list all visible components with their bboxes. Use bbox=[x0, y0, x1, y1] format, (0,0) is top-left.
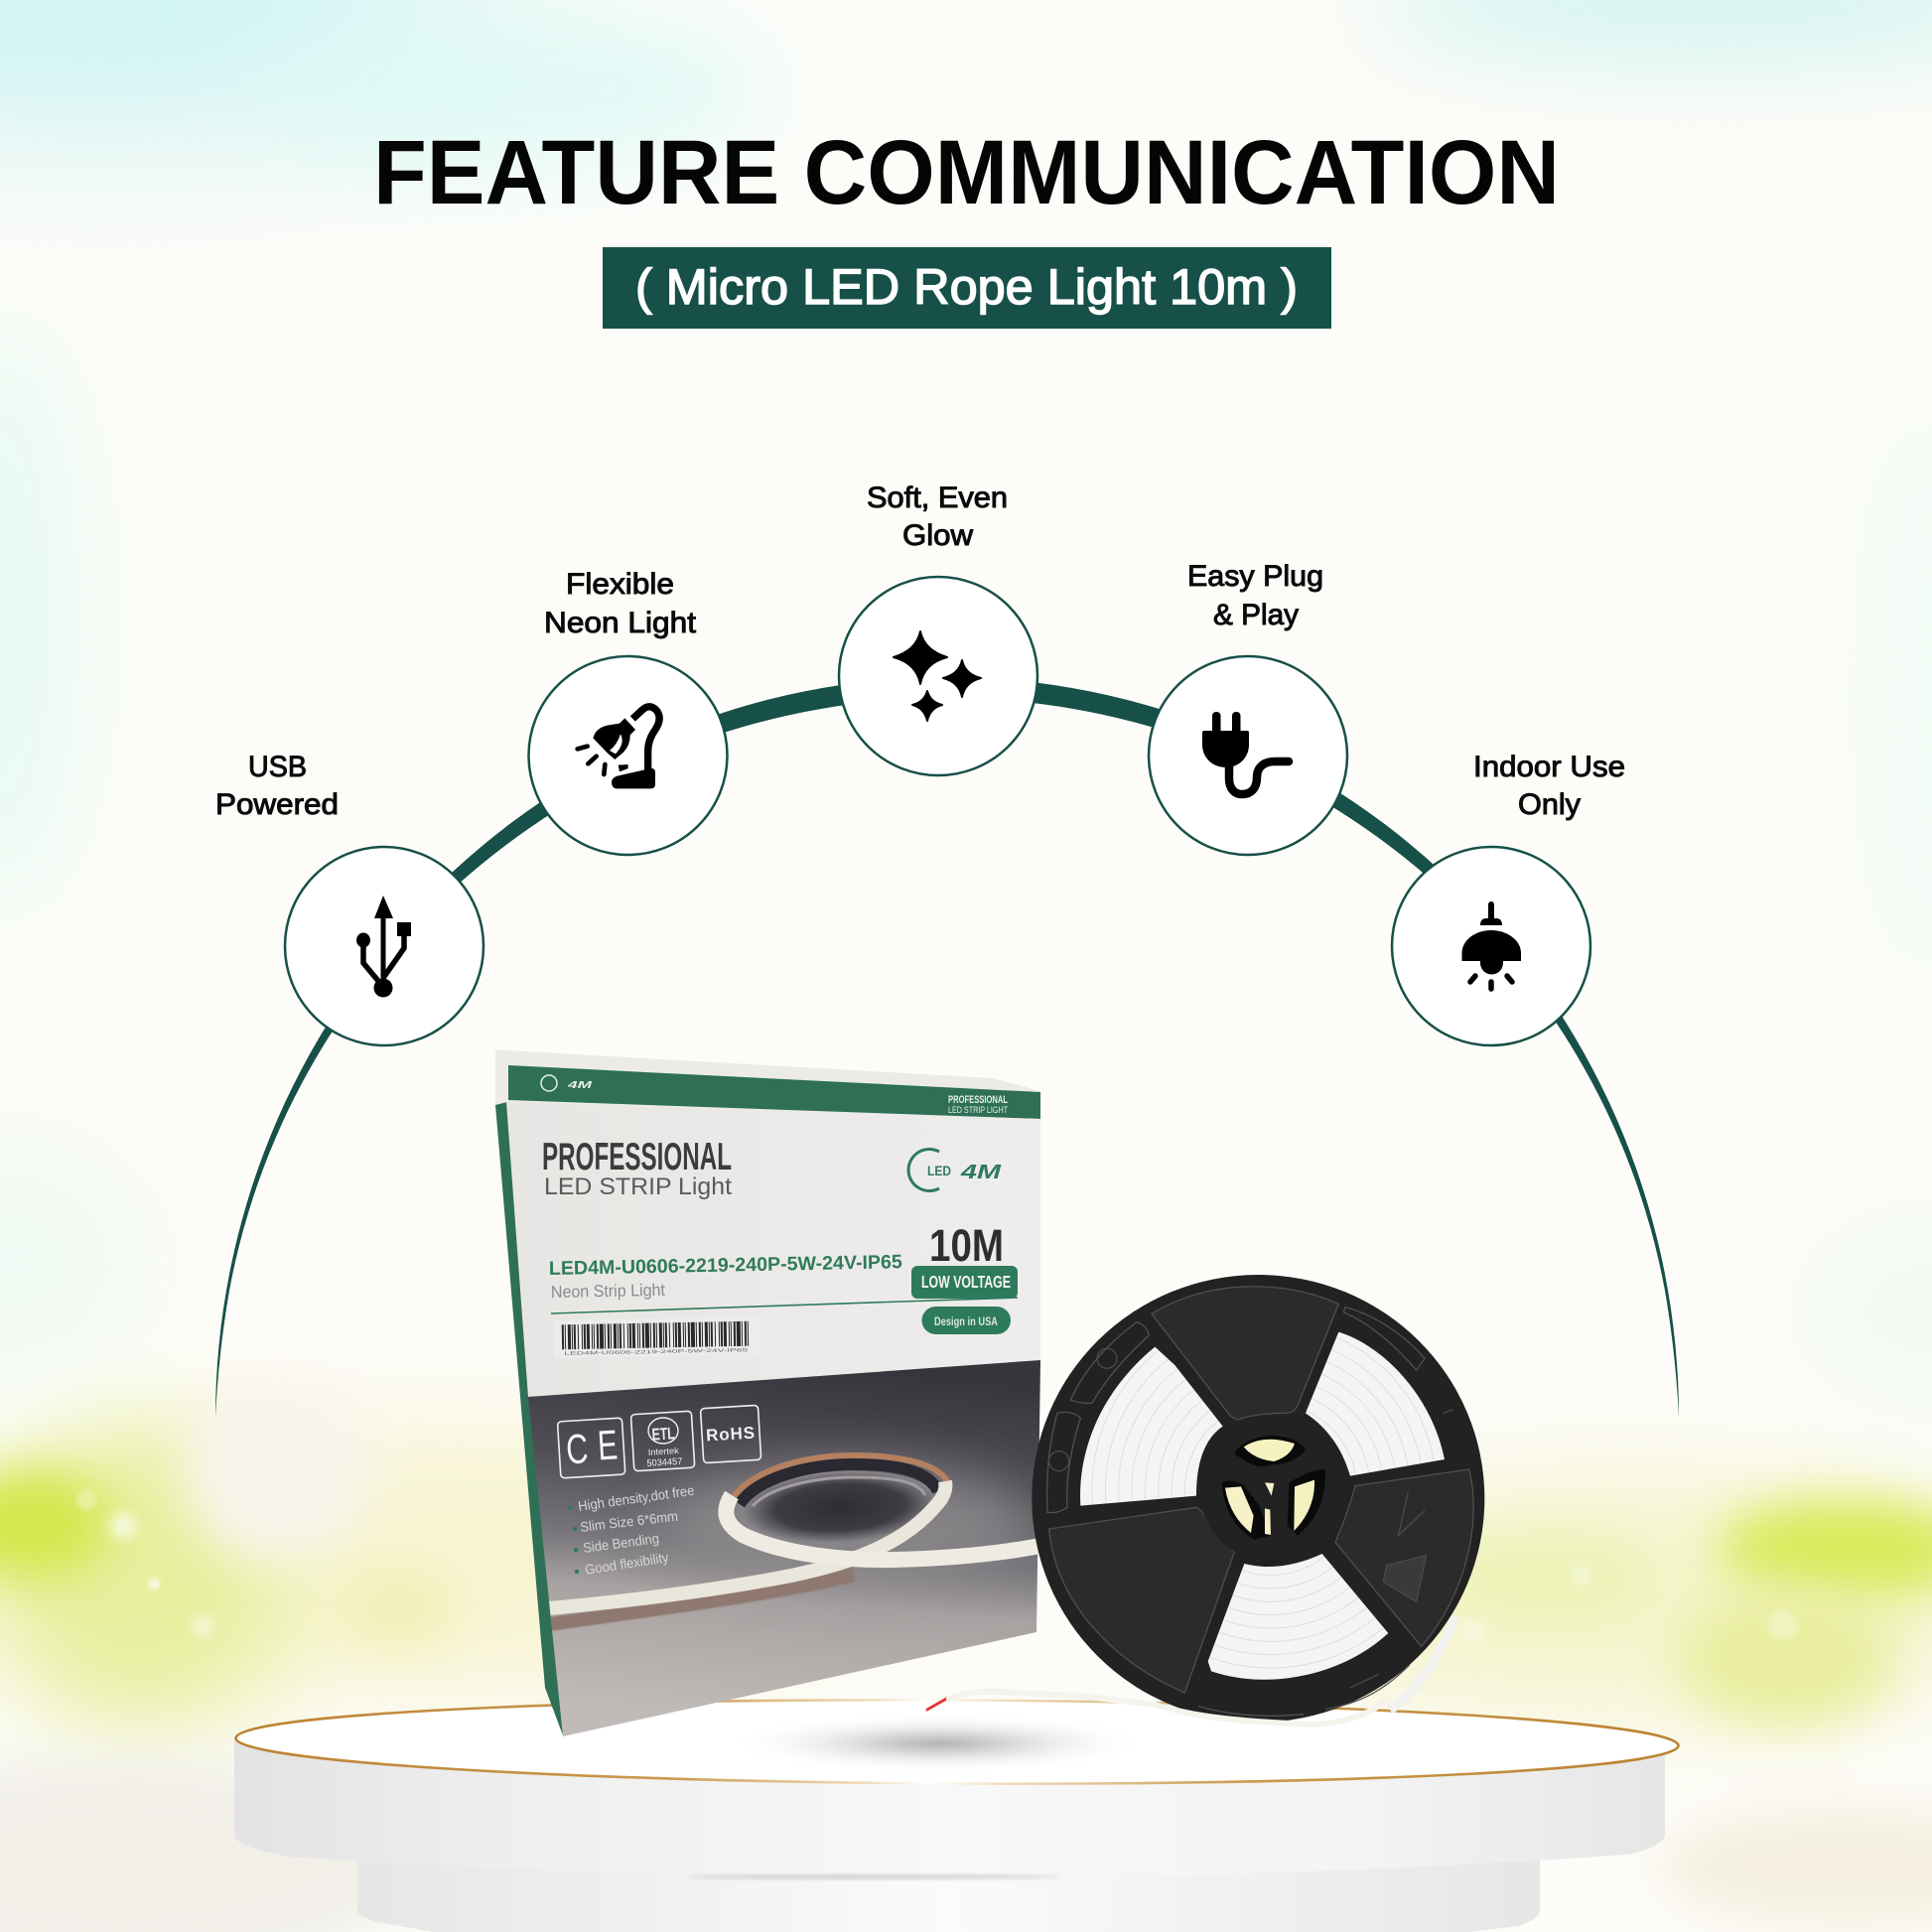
box photo panel bbox=[528, 1360, 1040, 1736]
box front face bbox=[506, 1102, 1040, 1397]
box spine bbox=[495, 1102, 563, 1735]
product: LED strip box: Neon Strip Light bbox=[551, 1281, 665, 1302]
label: USB Powered bbox=[215, 751, 339, 821]
product: LED strip box bbox=[495, 1049, 1040, 1736]
feature: USB Powered bbox=[215, 751, 483, 1045]
label: Easy Plug & Play bbox=[1187, 560, 1323, 631]
feature bullets on box bbox=[568, 1482, 695, 1578]
certification marks: 5034457 bbox=[646, 1456, 683, 1469]
LED strip behind reel bbox=[1390, 1616, 1455, 1710]
label: Indoor Use Only bbox=[1473, 751, 1625, 821]
barcode bbox=[554, 1316, 761, 1358]
icon: USB symbol bbox=[356, 896, 411, 997]
label: Indoor Use Only: Indoor Use bbox=[1473, 751, 1625, 783]
circle: lamp bbox=[528, 656, 727, 855]
reel rim highlights bbox=[1047, 1308, 1425, 1716]
title: FEATURE COMMUNICATION bbox=[373, 122, 1560, 223]
feature bullets on box: Slim Size 6*6mm bbox=[579, 1508, 679, 1535]
feature: Soft, Even Glow bbox=[839, 482, 1037, 775]
label: Flexible Neon Light bbox=[544, 568, 697, 639]
reel hub bbox=[1199, 1415, 1343, 1562]
label: Easy Plug & Play: Easy Plug bbox=[1187, 560, 1323, 593]
band text: PROFESSIONAL bbox=[948, 1094, 1008, 1106]
icon: desk lamp bbox=[578, 707, 659, 788]
label: Soft, Even Glow bbox=[867, 482, 1008, 552]
length badge: 10M bbox=[929, 1220, 1004, 1271]
subtitle banner bbox=[603, 247, 1331, 329]
model number: LED4M-U0606-2219-240P-5W-24V-IP65 bbox=[549, 1251, 902, 1280]
circle: ceiling lamp bbox=[1392, 847, 1590, 1045]
label: Easy Plug & Play: & Play bbox=[1213, 599, 1299, 631]
brand logo: 4M bbox=[960, 1162, 1003, 1183]
circle: plug bbox=[1149, 656, 1347, 855]
label: Flexible Neon Light: Flexible bbox=[566, 568, 674, 601]
reel blades bbox=[1049, 1287, 1473, 1693]
brand logo: LED bbox=[927, 1163, 951, 1178]
length badge bbox=[911, 1220, 1018, 1334]
label: USB Powered: Powered bbox=[215, 788, 339, 821]
circle: sparkle bbox=[839, 577, 1037, 775]
certification marks: E bbox=[597, 1421, 619, 1469]
feature: Flexible Neon Light bbox=[528, 568, 727, 855]
label: Indoor Use Only: Only bbox=[1518, 788, 1581, 821]
brand logo bbox=[908, 1149, 1003, 1191]
green top band bbox=[508, 1065, 1040, 1119]
circle: USB bbox=[285, 847, 483, 1045]
certification marks: Intertek bbox=[647, 1446, 680, 1457]
certification marks bbox=[557, 1405, 761, 1478]
feature: Easy Plug & Play bbox=[1149, 560, 1347, 855]
box back flap bbox=[495, 1049, 1040, 1122]
band text: LED STRIP LIGHT bbox=[948, 1105, 1008, 1115]
reel disc bbox=[1032, 1275, 1484, 1723]
reel embossed marks bbox=[1049, 1348, 1452, 1688]
LED strip cable bbox=[927, 1692, 1387, 1725]
band text bbox=[541, 1075, 1008, 1115]
feature: Indoor Use Only bbox=[1392, 751, 1625, 1045]
podium top with gold rim bbox=[235, 1697, 1679, 1787]
podium base bbox=[234, 1737, 1665, 1932]
feature bullets on box: Side Bending bbox=[582, 1530, 660, 1556]
neon strip photo bbox=[549, 1455, 1040, 1624]
icon: sparkles bbox=[894, 631, 981, 721]
barcode: LED4M-U0606-2219-240P-5W-24V-IP65 bbox=[564, 1347, 749, 1357]
label: Soft, Even Glow: Glow bbox=[902, 519, 973, 552]
icon: power plug bbox=[1202, 712, 1289, 794]
arc connecting the features bbox=[215, 677, 1679, 1418]
certification marks: ETL bbox=[651, 1424, 675, 1445]
product: LED strip box: LED STRIP Light bbox=[544, 1173, 732, 1200]
feature bullets on box: High density,dot free bbox=[577, 1482, 695, 1514]
label: Soft, Even Glow: Soft, Even bbox=[867, 482, 1008, 514]
label: Flexible Neon Light: Neon Light bbox=[544, 607, 697, 639]
product: LED strip reel bbox=[1032, 1275, 1484, 1723]
length badge: LOW VOLTAGE bbox=[921, 1272, 1011, 1292]
certification marks: C bbox=[565, 1425, 590, 1472]
strip windows bbox=[1080, 1332, 1445, 1680]
band text: 4M bbox=[566, 1080, 593, 1091]
subtitle banner: ( Micro LED Rope Light 10m ) bbox=[635, 259, 1298, 315]
label: USB Powered: USB bbox=[248, 751, 307, 783]
brand heading: PROFESSIONAL bbox=[542, 1136, 732, 1178]
feature bullets on box: Good flexibility bbox=[584, 1549, 669, 1578]
icon: ceiling lamp bbox=[1461, 901, 1521, 989]
certification marks: RoHS bbox=[706, 1424, 756, 1446]
length badge: Design in USA bbox=[934, 1314, 998, 1328]
